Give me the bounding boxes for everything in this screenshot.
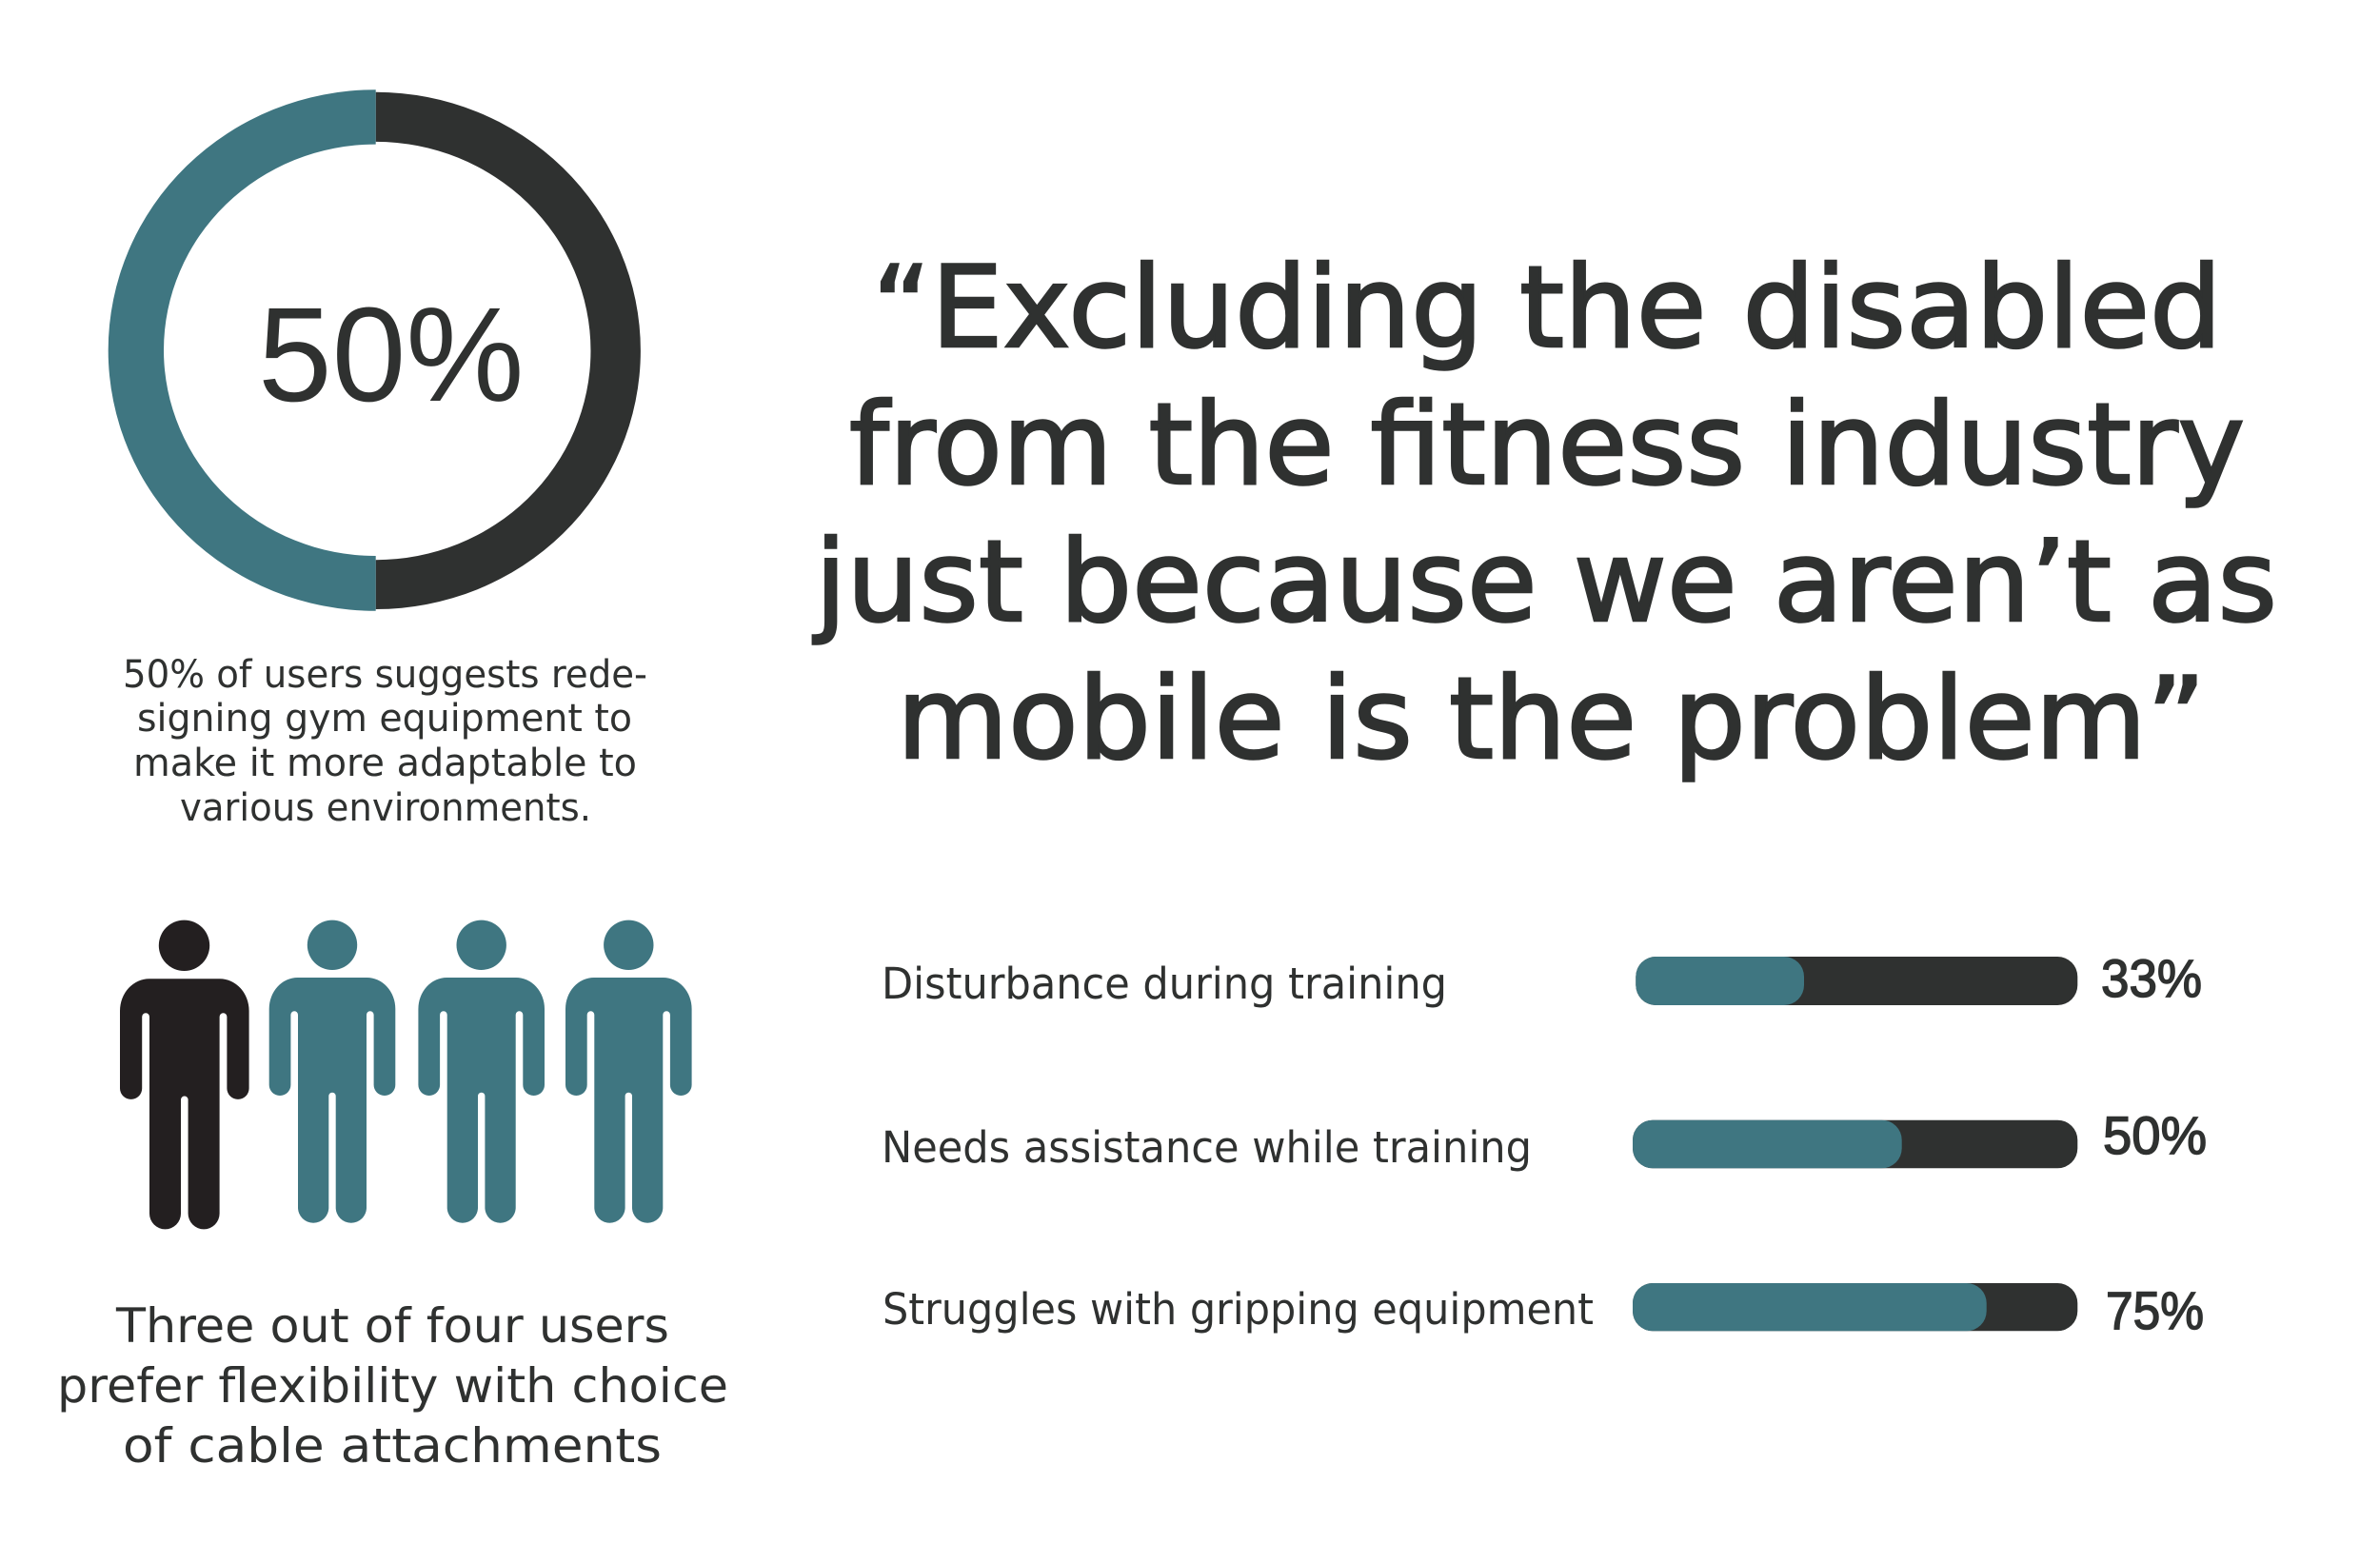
donut caption text: signing gym equipment to: [137, 697, 632, 741]
bar track: [1633, 1120, 2077, 1168]
bar label: Disturbance during training: [882, 959, 1447, 1009]
heading: quote: [812, 243, 2277, 785]
pictogram caption text: prefer flexibility with choice: [57, 1358, 728, 1414]
icon: person teal 1: [269, 920, 395, 1223]
heading: quote: just because we aren’t as: [812, 517, 2277, 648]
pictogram caption text: [57, 1298, 728, 1474]
icon: person teal 3: [565, 920, 692, 1223]
bar track: [1633, 1283, 2077, 1331]
bar row: Needs assistance while training: [882, 1105, 2207, 1173]
heading: quote: mobile is the problem”: [897, 654, 2206, 785]
donut caption text: 50% of users suggests rede-: [123, 653, 647, 697]
bar label: Struggles with gripping equipment: [883, 1284, 1594, 1335]
pictogram caption text: Three out of four users: [115, 1298, 669, 1354]
bar value: 50%: [2103, 1105, 2207, 1165]
bar fill: [1633, 1283, 1987, 1331]
bar row: Struggles with gripping equipment: [883, 1280, 2204, 1340]
pictogram caption text: of cable attachments: [123, 1418, 662, 1474]
donut caption text: make it more adaptable to: [133, 742, 637, 785]
donut segment: dark half: [376, 92, 641, 609]
heading: quote: from the fitness industry: [849, 380, 2245, 511]
donut caption text: various environments.: [180, 786, 591, 830]
bar row: Disturbance during training: [882, 948, 2202, 1009]
donut chart: 50%: [109, 89, 641, 611]
bar fill: [1636, 957, 1804, 1005]
icon: person teal 2: [418, 920, 545, 1223]
bar label: Needs assistance while training: [882, 1122, 1532, 1173]
bar fill: [1633, 1120, 1902, 1168]
bar value: 33%: [2101, 948, 2202, 1008]
icon: person black: [120, 920, 249, 1229]
bar value: 75%: [2106, 1280, 2204, 1340]
bar track: [1636, 957, 2077, 1005]
donut segment: teal half: [109, 89, 376, 611]
donut center value: 50%: [258, 279, 524, 429]
pictogram: three out of four people: [120, 920, 692, 1229]
donut caption text: [123, 653, 647, 830]
heading: quote: “Excluding the disabled: [872, 243, 2222, 374]
